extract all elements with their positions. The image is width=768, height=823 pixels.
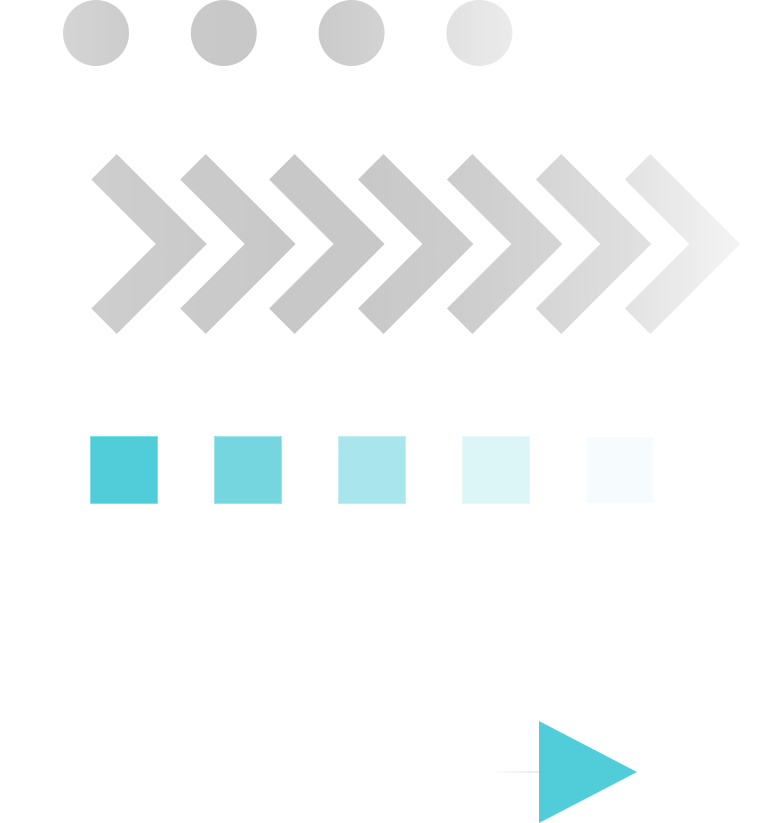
chevron 5: [447, 154, 562, 334]
square 1: [90, 436, 158, 504]
chevron 4: [358, 154, 474, 334]
square 2: [214, 436, 282, 504]
circle 4: [446, 0, 512, 66]
chevron 3: [269, 154, 385, 334]
row of five teal squares: [90, 436, 653, 504]
square 4: [462, 436, 530, 504]
arrow: teal triangle with faint tail: [488, 721, 637, 823]
square 3: [338, 436, 406, 504]
chevron 7: [625, 154, 740, 334]
chevron 1: [91, 154, 207, 334]
row of seven gray chevron arrows: [91, 154, 740, 334]
circle 2: [191, 0, 257, 66]
chevron 2: [180, 154, 296, 334]
chevron 6: [536, 154, 651, 334]
square 5: [587, 437, 653, 503]
arrow head: [539, 721, 637, 823]
row of four gray circles: [63, 0, 512, 66]
arrow tail: [488, 771, 539, 773]
circle 1: [63, 0, 129, 66]
circle 3: [319, 0, 385, 66]
